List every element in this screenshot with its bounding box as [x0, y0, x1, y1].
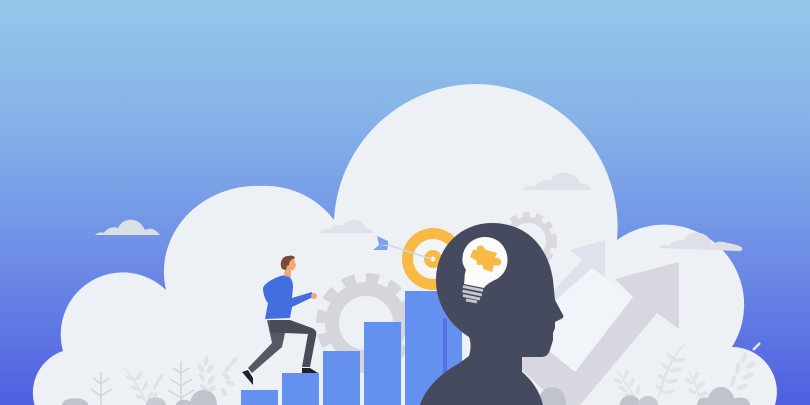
arrow: large grey diagonal — [522, 262, 679, 405]
shoe: front — [302, 368, 318, 373]
dart arrow — [373, 236, 432, 259]
light bulb with puzzle piece — [462, 237, 508, 302]
front leg — [270, 320, 316, 367]
small cloud: centre — [319, 220, 374, 233]
document: light sheet — [540, 268, 633, 372]
shirt — [263, 275, 313, 319]
hand — [311, 293, 317, 299]
small cloud: top centre — [522, 173, 591, 190]
large gear — [321, 278, 411, 368]
large cloud — [33, 84, 777, 405]
bulb glass — [462, 237, 508, 288]
arrow: light diagonal — [550, 240, 605, 310]
person climbing — [242, 256, 318, 385]
back leg — [248, 320, 285, 373]
head silhouette — [420, 223, 563, 405]
shoe: back — [242, 370, 253, 385]
bar chart: ascending steps — [241, 291, 462, 405]
neck and face — [284, 258, 296, 277]
puzzle piece — [470, 246, 501, 272]
small gear behind head — [502, 215, 554, 267]
small cloud: left — [95, 220, 160, 235]
hair — [281, 256, 295, 270]
foliage and bushes: left — [62, 356, 239, 405]
bulb screw base — [462, 286, 483, 302]
target — [402, 228, 464, 290]
small cloud: right — [659, 233, 742, 251]
foliage and bushes: right — [538, 343, 760, 405]
